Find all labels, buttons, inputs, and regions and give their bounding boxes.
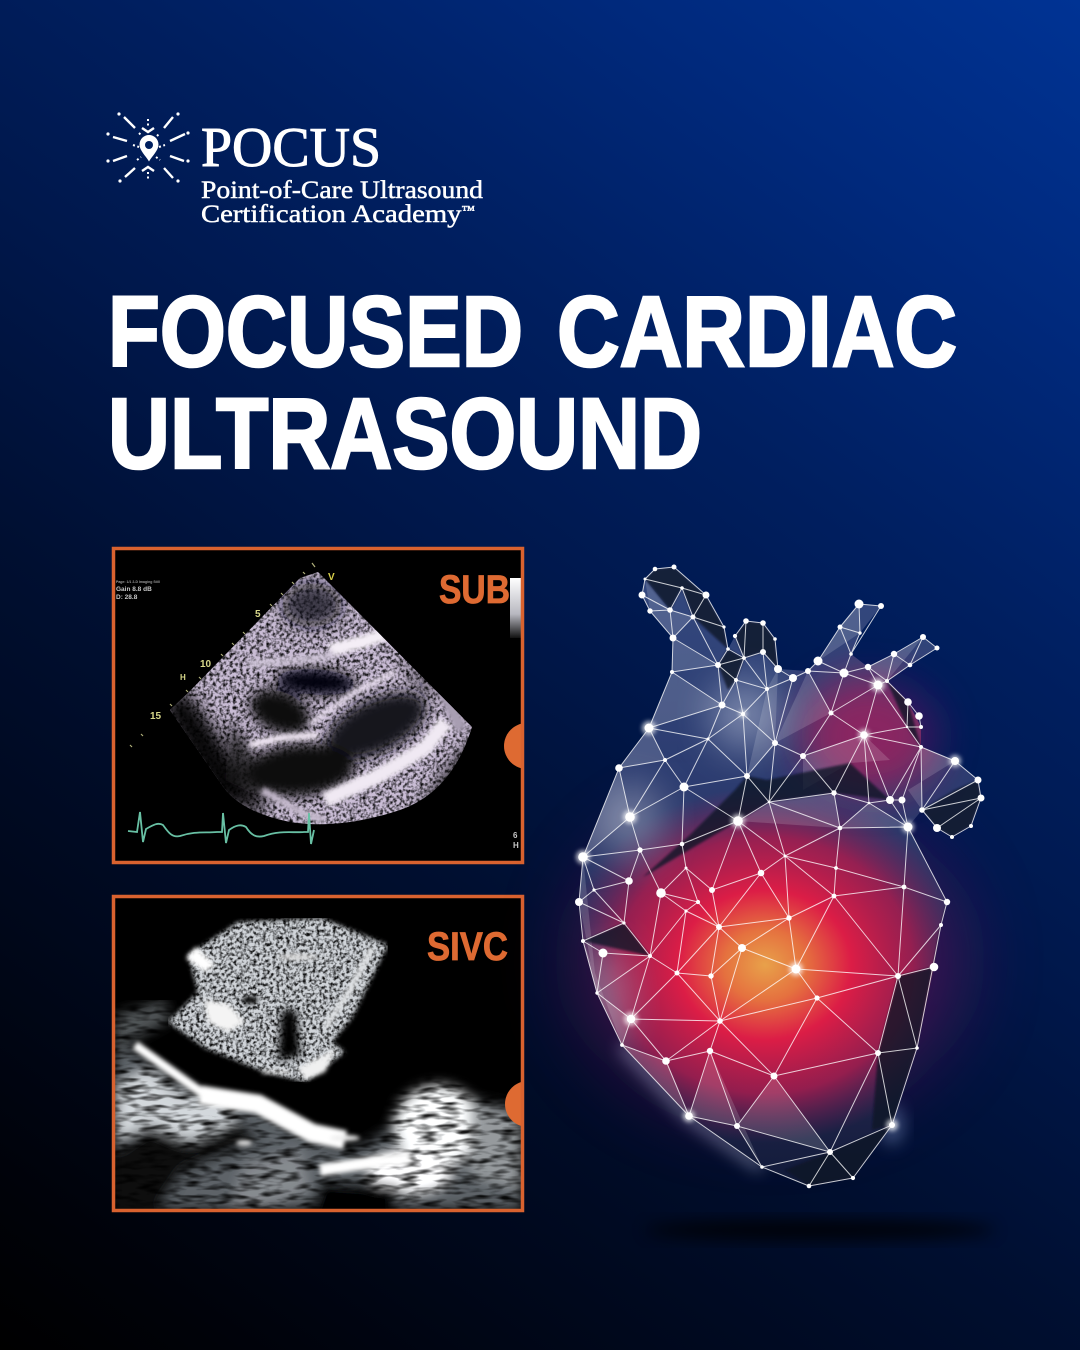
depth scale labels: H [180,673,186,682]
orange marker [504,724,521,768]
panel: SUB ultrasound image [112,547,550,864]
depth scale labels: V [328,572,335,583]
lower tissue, streaky [115,1000,521,1209]
frame [114,548,522,862]
depth scale labels [130,563,335,747]
panel: SIVC ultrasound image [112,895,551,1212]
machine readout: Page: 1/1 2-D Imaging Still [116,580,160,584]
frame [114,896,522,1210]
wireframe nodes [575,564,984,1188]
machine readout [116,580,519,850]
heart illustration [560,560,990,1190]
logo subtitle: Certification Academy [201,201,428,228]
grey scale bar [510,578,521,638]
logo subtitle: Point-of-Care Ultrasound [201,177,484,204]
logo subtitle: ™ [461,203,475,217]
logo: POCUS [106,112,484,228]
label: SIVC: SIVC [427,925,508,969]
ECG trace [128,812,314,844]
machine readout: H [513,841,519,850]
liver, speckled [168,918,388,1082]
heart shadow [645,1220,995,1240]
icon: location pin with radiating rays [106,112,190,183]
dark facets [583,567,981,1186]
ultrasound sector scan [116,563,550,850]
machine readout: D: 28.8 [116,594,138,601]
depth scale labels: 10 [200,659,212,670]
title: Focused Cardiac Ultrasound: ULTRASOUND [108,378,702,490]
outer glow [580,680,960,1167]
ultrasound subcostal scan [115,918,551,1209]
depth scale labels: 5 [255,609,261,620]
machine readout: Gain 8.8 dB [116,586,152,593]
label: SUB: SUB [439,568,510,612]
title: Focused Cardiac Ultrasound [108,276,957,490]
light facets [579,579,955,1167]
wordmark POCUS: POCUS [201,117,381,179]
logo subtitle [201,177,484,228]
title: Focused Cardiac Ultrasound: CARDIAC [557,276,957,388]
wireframe lines [579,567,981,1186]
depth scale labels: 15 [150,711,162,722]
title: Focused Cardiac Ultrasound: FOCUSED [108,276,523,388]
heart body with facets [560,560,990,1190]
orange marker [505,1082,521,1126]
machine readout: 6 [513,831,518,840]
